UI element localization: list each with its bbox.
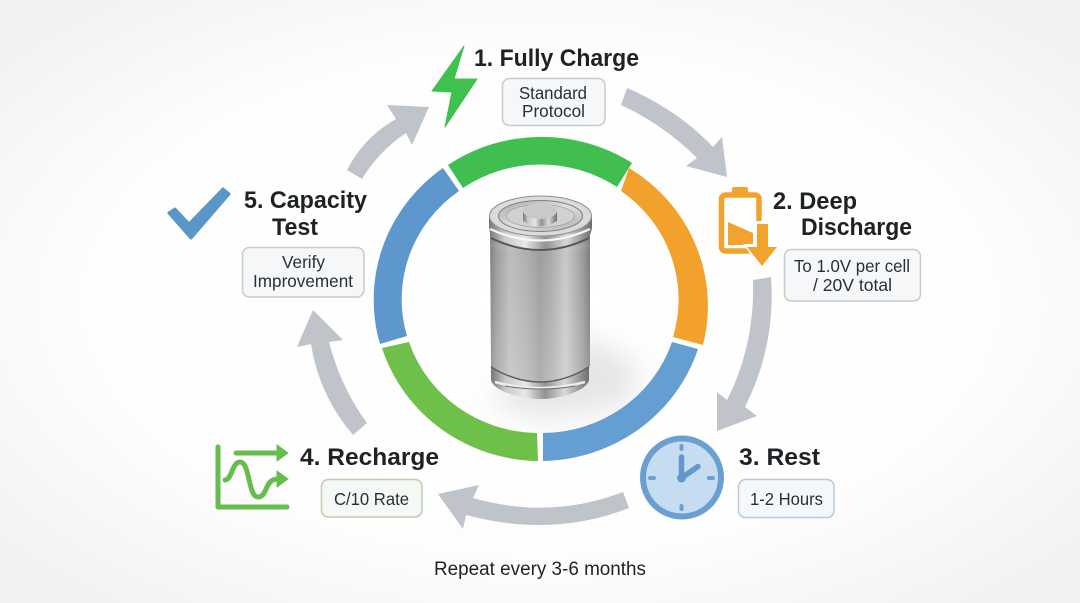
label box: duration (738, 480, 834, 518)
step 5: capacity test (169, 187, 368, 297)
label box: charge rate (322, 480, 422, 517)
heading: deep discharge: Discharge (801, 214, 912, 241)
battery cylinder (489, 196, 592, 399)
ring segment: blue right (543, 342, 698, 461)
battery top face (490, 196, 592, 236)
label box: verify improvement: Verify (282, 252, 325, 272)
label box: voltage target (784, 250, 920, 301)
heading: deep discharge (773, 188, 912, 241)
arrow: capacity test to charge (347, 105, 429, 179)
arrow: charge to discharge (621, 88, 727, 177)
icon: clock (643, 438, 721, 516)
battery body (490, 232, 590, 382)
icon: charge curve chart (218, 445, 288, 507)
label box: verify improvement (242, 248, 364, 297)
icon: battery discharge (722, 187, 781, 270)
step 1: fully charge (432, 45, 639, 127)
heading: recharge: 4. Recharge (300, 444, 439, 471)
battery bottom ring (491, 366, 589, 399)
ring segment: green left (382, 342, 538, 461)
heading: capacity test (244, 187, 368, 241)
arrow: recharge to capacity test (297, 310, 367, 435)
battery shadow (485, 335, 640, 420)
heading: rest: 3. Rest (739, 444, 820, 471)
heading: capacity test: 5. Capacity (244, 187, 368, 214)
label box: standard protocol: Standard (519, 83, 587, 103)
label box: standard protocol: Protocol (522, 101, 585, 121)
label box: standard protocol (502, 78, 605, 126)
label box: voltage target: To 1.0V per cell (794, 256, 910, 276)
icon: check mark (169, 189, 229, 238)
step 2: deep discharge (722, 187, 920, 301)
label box: voltage target: / 20V total (813, 275, 892, 295)
icon: lightning bolt (432, 46, 477, 127)
label box: duration: 1-2 Hours (750, 489, 823, 509)
heading: deep discharge: 2. Deep (773, 188, 857, 215)
ring segment: blue left (374, 168, 459, 344)
footer note: Repeat every 3-6 months (434, 559, 646, 580)
arrow: rest to recharge (438, 485, 629, 529)
battery top rim (489, 216, 592, 250)
heading: fully charge: 1. Fully Charge (474, 45, 639, 72)
label box: charge rate: C/10 Rate (334, 489, 409, 509)
step 3: rest (643, 438, 834, 518)
label box: verify improvement: Improvement (253, 271, 353, 291)
central cycle ring (374, 137, 708, 461)
heading: capacity test: Test (272, 214, 318, 241)
arrow: discharge to rest (717, 277, 772, 431)
ring segment: green top (448, 137, 632, 188)
ring segment: orange (621, 168, 708, 345)
battery terminal (523, 211, 557, 226)
step 4: recharge (218, 444, 439, 517)
